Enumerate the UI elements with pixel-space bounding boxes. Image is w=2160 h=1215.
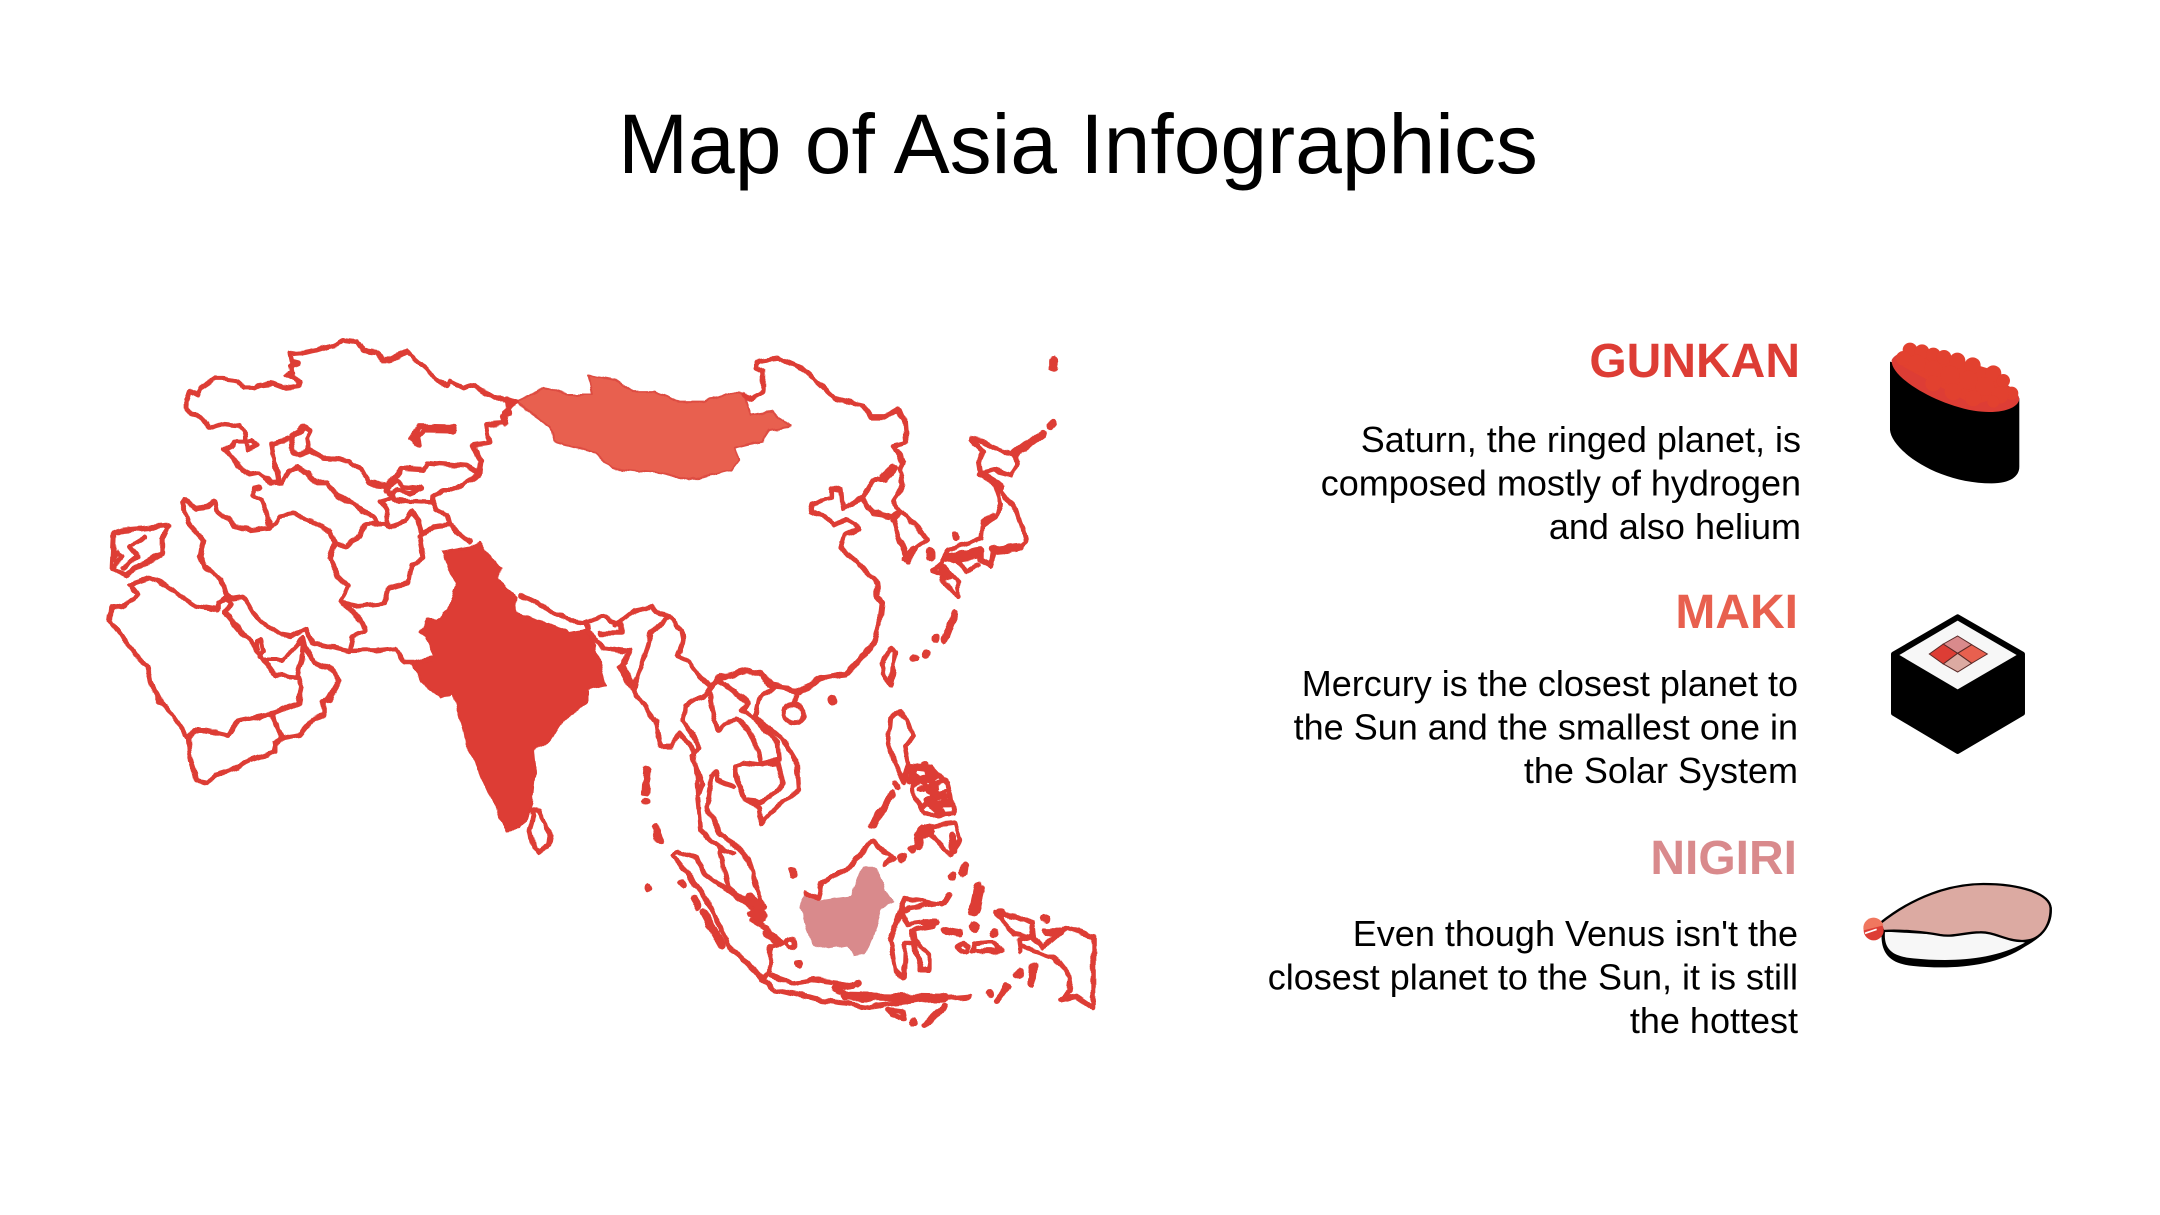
icon: nigiri sushi <box>1863 884 2052 967</box>
item: Gunkan text <box>1321 335 1801 547</box>
country: India (highlighted) <box>413 542 606 830</box>
item: Nigiri text <box>1268 832 1798 1041</box>
heading: Gunkan: GUNKAN <box>1589 335 1800 388</box>
west and central Asia outlines <box>110 340 513 663</box>
description: Maki: Mercury is the closest planet to <box>1302 663 1798 704</box>
item: Maki text <box>1294 586 1798 791</box>
description: Nigiri: the hottest <box>1630 1000 1798 1041</box>
description: Gunkan: and also helium <box>1549 506 1801 547</box>
description: Gunkan: composed mostly of hydrogen <box>1321 462 1801 504</box>
description: Nigiri: Even though Venus isn't the <box>1353 913 1798 954</box>
heading: Maki: MAKI <box>1675 586 1798 639</box>
description: Maki: the Sun and the smallest one in <box>1294 706 1798 748</box>
icon: maki sushi <box>1893 617 2023 752</box>
China, Korea, Japan outlines <box>502 398 515 425</box>
description: Nigiri: closest planet to the Sun, it is still <box>1268 956 1798 998</box>
Southeast Asia outlines <box>620 650 1093 1025</box>
description: Maki: the Solar System <box>1524 750 1798 791</box>
description: Gunkan: Saturn, the ringed planet, is <box>1361 419 1801 460</box>
heading: Nigiri: NIGIRI <box>1650 832 1797 885</box>
title: Map of Asia Infographics <box>618 97 1538 191</box>
country: Mongolia (highlighted) <box>502 358 1054 700</box>
icon: gunkan sushi <box>1890 343 2019 483</box>
region: Borneo (highlighted) <box>800 868 893 955</box>
map of Asia <box>110 340 1093 1025</box>
